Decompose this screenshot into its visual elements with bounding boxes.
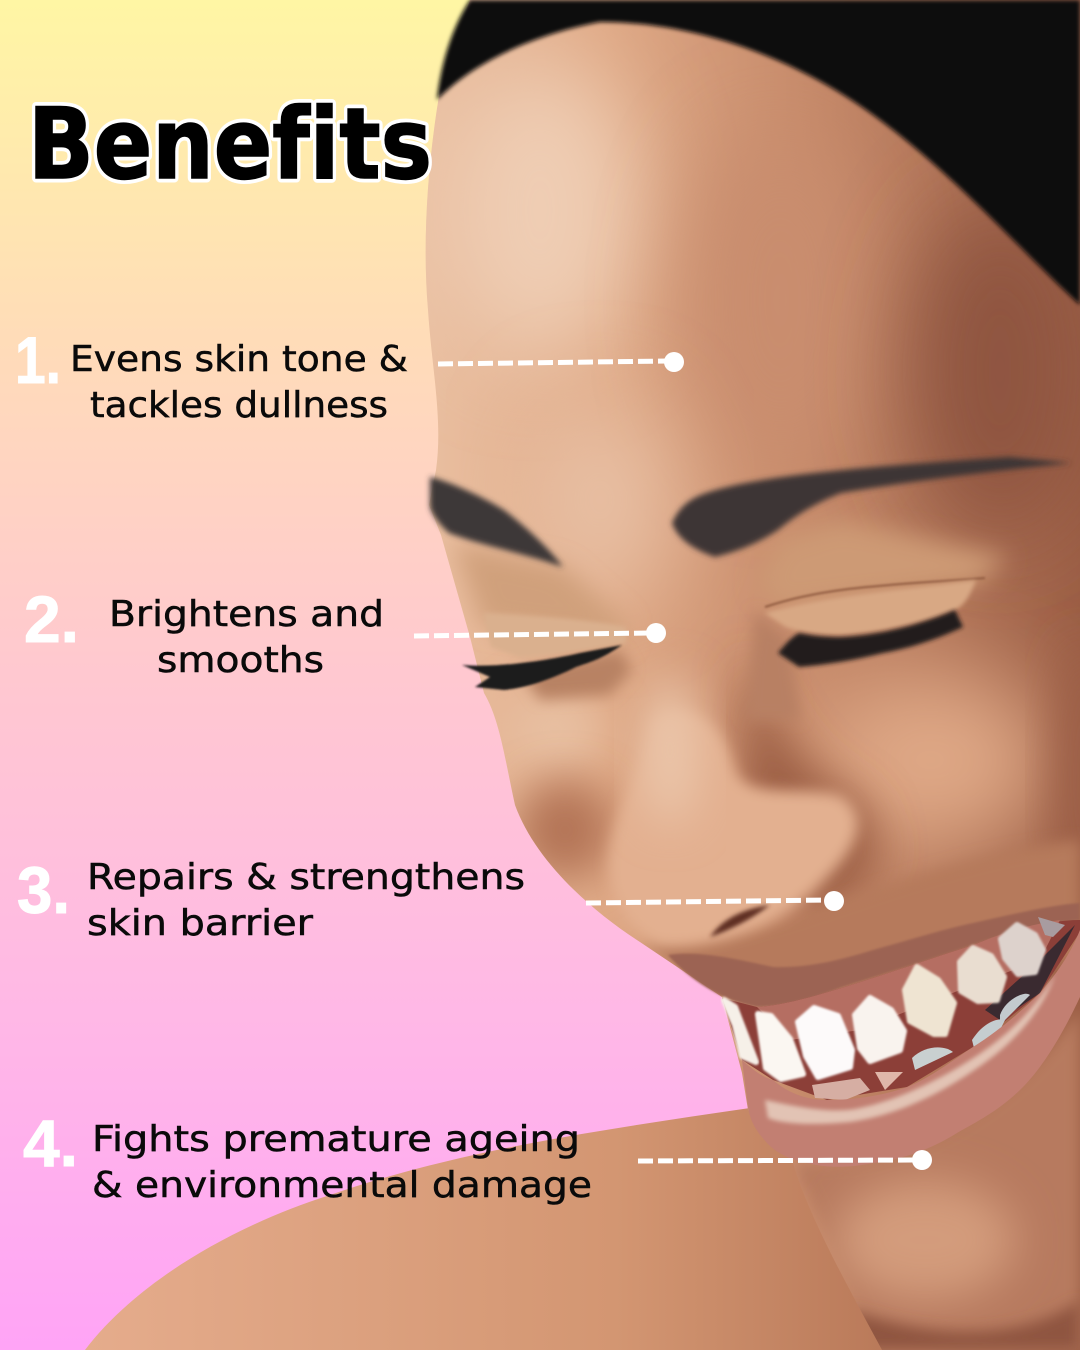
connector 3	[586, 891, 844, 911]
back dark	[985, 925, 1075, 1020]
connector 2	[414, 623, 666, 643]
benefit 4: 4.	[23, 1106, 78, 1180]
lip highlight	[765, 975, 1055, 1124]
right eye corner wrinkles	[750, 617, 797, 711]
chin light	[835, 1180, 1015, 1300]
left eyelid	[483, 613, 626, 658]
left eyebrow	[430, 477, 563, 567]
right eyeshadow	[757, 520, 1009, 610]
mouth interior	[722, 920, 1080, 1100]
benefit 2: 2.	[24, 582, 79, 656]
temple shade	[910, 200, 1080, 540]
benefit 1: tackles dullness	[90, 385, 388, 426]
brow centre highlight	[530, 400, 670, 600]
benefit 3: skin barrier	[87, 903, 313, 944]
shoulder	[85, 1108, 900, 1350]
upper-left cheek highlight	[516, 700, 610, 768]
left eyeshadow	[454, 542, 618, 626]
nose bridge light	[642, 675, 698, 825]
mid forehead tone	[674, 219, 727, 346]
connector 1	[438, 352, 684, 372]
lower lip	[742, 930, 1080, 1167]
benefit 4: Fights premature ageing	[92, 1119, 580, 1160]
right cheek	[810, 670, 1050, 850]
chin	[793, 1010, 1080, 1350]
lower-left cheek	[515, 780, 615, 880]
benefit 3: 3.	[17, 853, 70, 927]
right lashes	[778, 610, 963, 667]
right eyebrow	[672, 457, 1072, 557]
benefit 4	[23, 1106, 592, 1206]
left lashes	[462, 645, 622, 690]
face skin	[400, 0, 1080, 1350]
benefit 2: Brightens and	[109, 594, 384, 635]
nostril	[710, 905, 770, 937]
hair	[437, 0, 1080, 305]
title: Benefits	[28, 88, 432, 202]
benefit 2	[24, 582, 384, 681]
benefit 4: & environmental damage	[92, 1165, 592, 1206]
benefit 2: smooths	[157, 640, 324, 681]
benefit 1	[15, 323, 408, 426]
left under-eye	[520, 650, 632, 700]
upper lip	[668, 903, 1080, 1007]
eyelid crease	[765, 578, 985, 607]
benefit 3	[17, 853, 525, 944]
far right cheek shade	[1038, 699, 1080, 830]
right eyelid	[765, 580, 976, 635]
nose side shade	[740, 650, 878, 920]
connector 4	[638, 1150, 932, 1170]
jaw shadow	[850, 1300, 1080, 1350]
title: Benefits	[28, 88, 432, 202]
benefit 1: Evens skin tone &	[70, 339, 408, 380]
gums	[757, 920, 1060, 1040]
forehead highlight	[440, 60, 640, 360]
nose tip	[609, 711, 858, 946]
philtrum	[640, 840, 1080, 1000]
benefit 1: 1.	[15, 323, 61, 397]
benefit 3: Repairs & strengthens	[87, 857, 525, 898]
teeth	[724, 917, 1065, 1100]
